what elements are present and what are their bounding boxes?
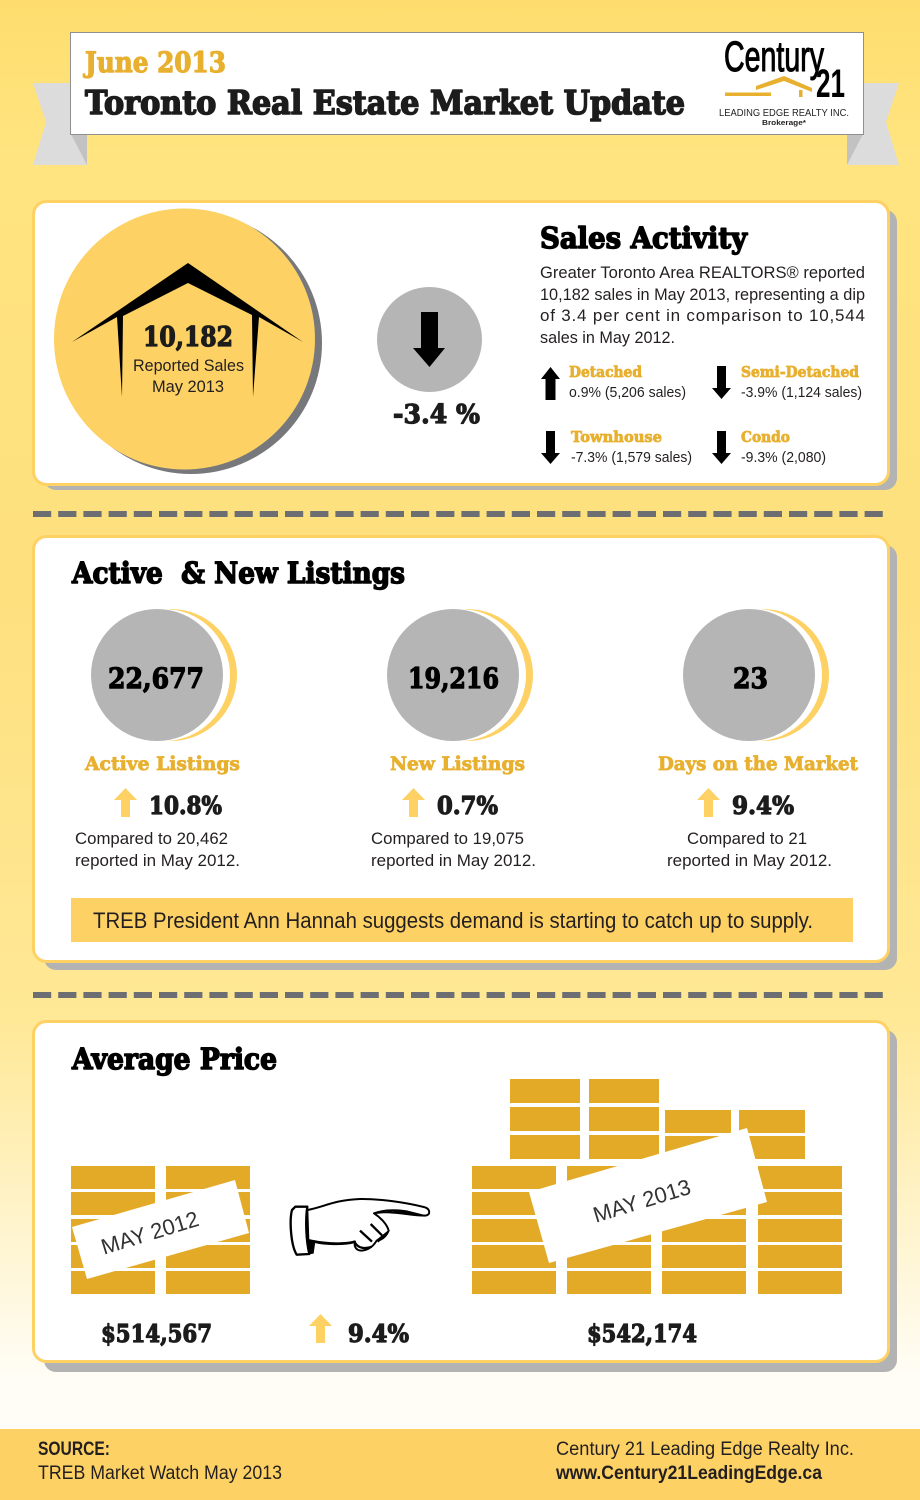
stat: detached — [541, 363, 686, 401]
stat: days on the market: Days on the Market — [658, 753, 858, 775]
stat: new listings: Compared to 19,075 — [371, 829, 524, 848]
stat: semi-detached: -3.9% (1,124 sales) — [741, 384, 862, 401]
callout: TREB president quote: TREB President Ann Hannah suggests demand is starting to catch up to supply. — [93, 908, 813, 933]
stat: days on the market: Compared to 21 — [687, 829, 807, 848]
stat: active listings: 22,677 — [108, 662, 204, 695]
arrow: price up — [309, 1314, 332, 1343]
company contact: www.Century21LeadingEdge.ca — [555, 1463, 822, 1484]
price: May 2013: $542,174 — [587, 1319, 697, 1348]
stat: days on the market: 9.4% — [732, 791, 794, 820]
panel: average price — [34, 1022, 897, 1372]
ribbon: left tail — [33, 83, 87, 165]
source: TREB Market Watch May 2013 — [38, 1463, 282, 1484]
stat: condo: -9.3% (2,080) — [741, 449, 826, 466]
stat: active listings: Active Listings — [84, 753, 240, 775]
change indicator: -3.4 % — [393, 400, 480, 430]
stat: new listings: New Listings — [390, 753, 525, 775]
reported sales circle — [54, 208, 322, 474]
callout: TREB president quote — [71, 898, 853, 942]
stat: days on the market — [658, 609, 858, 870]
logo: Century 21 Leading Edge Realty: 21 — [816, 62, 845, 106]
stat: detached: Detached — [569, 363, 642, 381]
title: Toronto Real Estate Market Update — [85, 83, 685, 122]
header banner — [70, 32, 864, 134]
chart: May 2013 bricks — [472, 1079, 842, 1294]
stat: active listings: reported in May 2012. — [75, 851, 240, 870]
stat: townhouse: -7.3% (1,579 sales) — [571, 449, 692, 466]
stat: townhouse: Townhouse — [571, 428, 662, 446]
panel: active and new listings — [34, 536, 897, 970]
chart: May 2013 bricks: MAY 2013 — [590, 1174, 694, 1228]
ribbon: right tail — [847, 83, 899, 165]
source — [38, 1439, 282, 1484]
heading: date: June 2013 — [82, 46, 226, 79]
logo: Century 21 Leading Edge Realty — [719, 33, 849, 127]
price change: 9.4% — [348, 1319, 409, 1348]
text block: sales summary: Greater Toronto Area REALTORS® reported — [540, 263, 865, 282]
chart: May 2012 bricks: MAY 2012 — [98, 1206, 202, 1260]
stat: days on the market: 23 — [733, 662, 768, 695]
chart: May 2012 bricks — [71, 1166, 250, 1294]
stat: detached: o.9% (5,206 sales) — [569, 384, 686, 401]
reported sales circle: Reported Sales — [133, 356, 244, 375]
text block: sales summary: of 3.4 per cent in comparison to 10,544 — [540, 306, 865, 325]
reported sales circle: May 2013 — [152, 377, 224, 396]
heading: average price: Average Price — [71, 1042, 277, 1076]
logo: Century 21 Leading Edge Realty: Century — [724, 33, 824, 81]
stat: townhouse — [541, 428, 692, 466]
stat: new listings — [371, 609, 536, 870]
footer — [0, 1429, 920, 1500]
company contact: Century 21 Leading Edge Realty Inc. — [556, 1439, 854, 1460]
heading: sales activity: Sales Activity — [540, 221, 748, 255]
logo: Century 21 Leading Edge Realty: LEADING EDGE REALTY INC. — [719, 108, 849, 119]
logo: Century 21 Leading Edge Realty: Brokerage* — [762, 120, 806, 127]
stat: condo — [712, 428, 826, 466]
stat: new listings: 0.7% — [437, 791, 498, 820]
stat: new listings: reported in May 2012. — [371, 851, 536, 870]
text block: sales summary: 10,182 sales in May 2013, representing a dip — [540, 285, 865, 304]
stat: active listings: 10.8% — [149, 791, 222, 820]
source: SOURCE: — [38, 1439, 110, 1460]
text block: sales summary — [540, 263, 865, 347]
stat: semi-detached — [712, 363, 862, 401]
panel: sales — [34, 202, 897, 490]
icon: pointing hand — [291, 1199, 429, 1255]
stat: semi-detached: Semi-Detached — [741, 363, 859, 381]
heading: listings: Active & New Listings — [71, 556, 405, 590]
reported sales circle: 10,182 — [143, 322, 233, 353]
price: May 2012: $514,567 — [101, 1319, 212, 1348]
stat: condo: Condo — [741, 428, 790, 446]
company contact — [555, 1439, 854, 1484]
stat: active listings: Compared to 20,462 — [75, 829, 228, 848]
stat: days on the market: reported in May 2012. — [667, 851, 832, 870]
change indicator — [377, 287, 482, 430]
stat: active listings — [75, 609, 240, 870]
icon: house outline — [72, 263, 303, 397]
stat: new listings: 19,216 — [408, 662, 499, 695]
text block: sales summary: sales in May 2012. — [540, 328, 675, 347]
